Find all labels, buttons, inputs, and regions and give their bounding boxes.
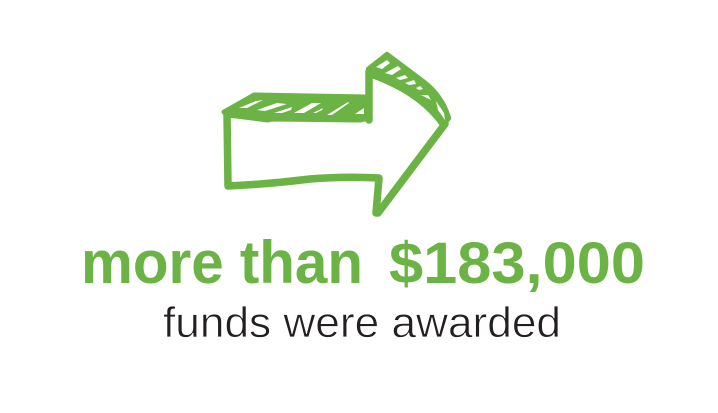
arrow shaft top band bbox=[224, 95, 369, 120]
heading: more than: more than bbox=[81, 229, 363, 296]
heading: amount: $183,000 bbox=[389, 231, 645, 296]
hatch highlights bbox=[239, 60, 445, 120]
caption: funds were awarded: funds were awarded bbox=[163, 299, 561, 347]
arrow outline bbox=[227, 72, 445, 213]
icon: hand-drawn green arrow bbox=[224, 54, 449, 213]
arrow head top band bbox=[368, 54, 449, 126]
